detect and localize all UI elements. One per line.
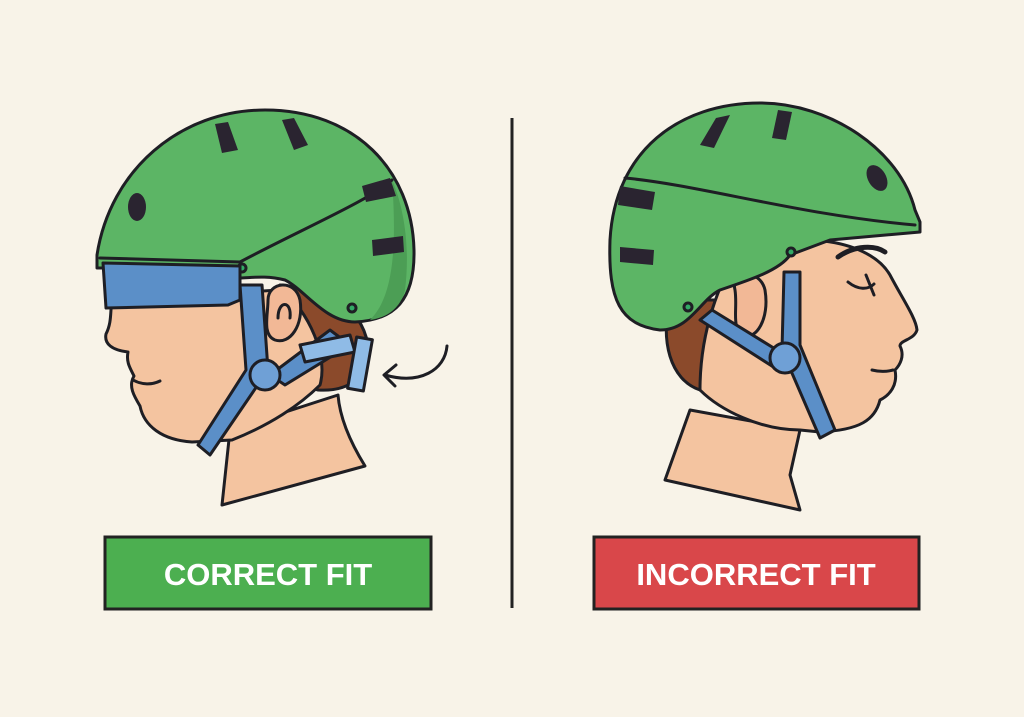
face (700, 240, 917, 432)
helmet shell (610, 103, 920, 330)
face (106, 290, 322, 442)
closed eye (848, 275, 874, 295)
label: incorrect fit (594, 537, 919, 609)
helmet shell (97, 110, 414, 322)
left figure: correct fit (97, 110, 447, 505)
helmet vents (128, 118, 404, 256)
label: correct fit: CORRECT FIT (164, 557, 372, 592)
vents (618, 110, 892, 265)
hair back (279, 285, 368, 390)
eyebrow (838, 247, 885, 257)
label: correct fit (105, 537, 431, 609)
hair back (666, 300, 734, 390)
ear (267, 285, 301, 341)
straps (198, 285, 268, 455)
arrow (385, 346, 447, 378)
label: incorrect fit: INCORRECT FIT (636, 557, 876, 592)
visor (103, 263, 240, 308)
mouth (133, 380, 160, 384)
right figure: incorrect fit (610, 103, 920, 510)
mouth (872, 370, 893, 372)
straps (782, 272, 835, 438)
buckle (300, 335, 355, 362)
neck (665, 410, 800, 510)
neck (222, 395, 365, 505)
divider line (510, 118, 514, 608)
ear (734, 274, 766, 336)
